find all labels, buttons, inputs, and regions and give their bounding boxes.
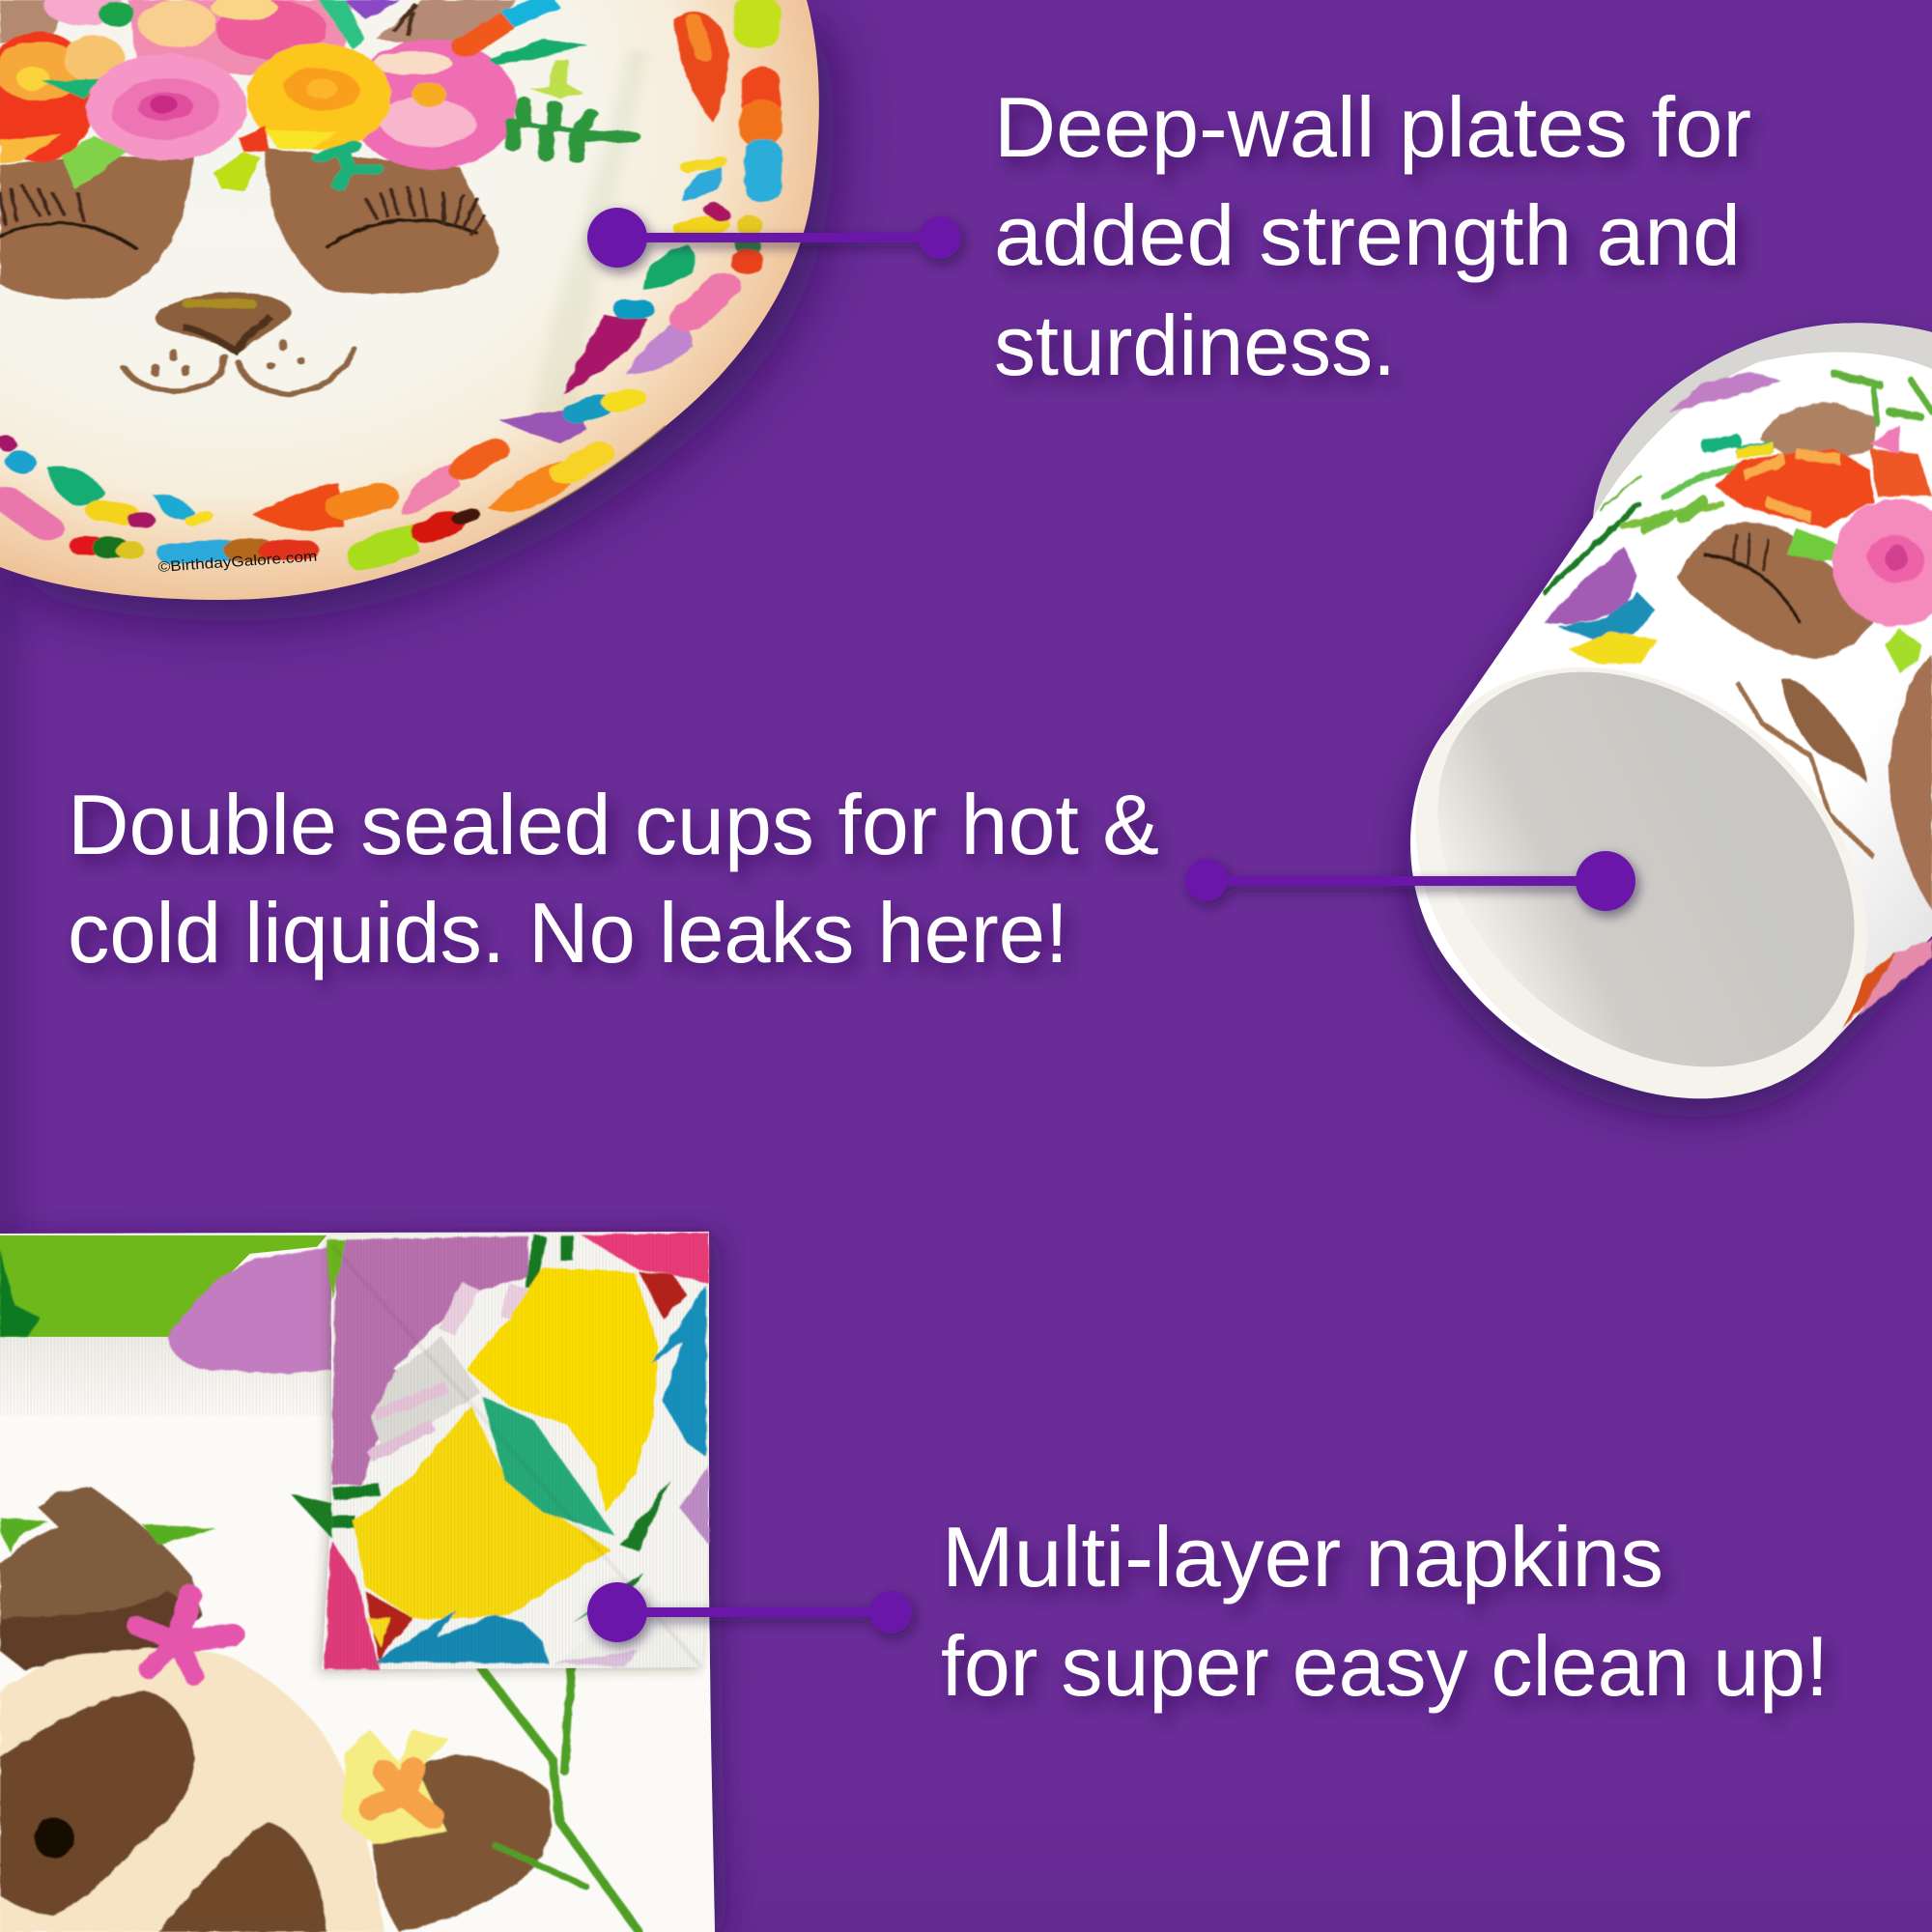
pink corner: [325, 1540, 380, 1669]
panel: paper plate: [0, 0, 819, 600]
brown eye patch: [1678, 523, 1885, 659]
sloth eye: [34, 1818, 74, 1859]
sloth face: [0, 1648, 384, 1932]
closed eyes: [0, 185, 485, 248]
teal leaf: [483, 1397, 615, 1536]
nose and mouth: [1781, 678, 1867, 782]
right ear: [374, 1755, 553, 1932]
cup anchor dot: [1576, 851, 1635, 911]
fold corner triangle: [553, 1586, 701, 1667]
panel: napkin: [0, 1232, 715, 1932]
sloth ear: [0, 1487, 202, 1669]
lilac strokes: [680, 1466, 709, 1545]
small leaf: [572, 1480, 670, 1623]
green band: [0, 1236, 327, 1337]
faint ghost stem: [532, 51, 649, 417]
text block: napkins: for super easy clean up!: [941, 1618, 1829, 1714]
pink rose: [1833, 499, 1932, 626]
plate anchor dot: [587, 208, 647, 268]
plate copyright text: ©BirthdayGalore.com: [157, 549, 318, 576]
lime blob: [1885, 629, 1921, 672]
orange flower: [1715, 449, 1874, 528]
napkin connector line: [617, 1607, 891, 1617]
text block: cups: cold liquids. No leaks here!: [68, 885, 1068, 980]
sloth eye patches: [0, 1690, 194, 1916]
lower yellow wash: [354, 1406, 611, 1619]
diagonal fold line: [331, 1244, 701, 1667]
upper brown patch: [1759, 402, 1876, 460]
text block: plates: added strength and: [994, 187, 1741, 283]
llama eye patches: [0, 148, 499, 299]
cup artwork: [1545, 372, 1932, 1039]
rim feathers: [6, 12, 763, 570]
rib shading: [0, 1337, 331, 1415]
text block: cups: [68, 777, 1159, 980]
llama nose and mouth: [125, 292, 354, 394]
napkin sheet: [0, 1232, 715, 1932]
text block: plates: Deep-wall plates for: [994, 79, 1751, 175]
green strips: [331, 1236, 567, 1521]
small colour strokes: [1705, 440, 1770, 451]
napkin artwork: [0, 1232, 709, 1932]
plate end dot: [919, 216, 961, 259]
cup end dot: [1185, 859, 1228, 901]
llama ears: [0, 0, 516, 49]
closed eye: [1704, 554, 1801, 624]
lilac feather: [1668, 372, 1781, 412]
cup rim: [1593, 323, 1932, 518]
bottom feather: [1828, 952, 1896, 1039]
cup base inner: [1360, 591, 1932, 1148]
pink flower: [137, 1596, 233, 1676]
lilac blotch: [168, 1247, 331, 1374]
text block: napkins: [941, 1509, 1829, 1714]
napkin anchor dot: [587, 1582, 647, 1642]
dark green stem: [0, 1249, 41, 1337]
pale grey fold: [370, 1337, 480, 1452]
connector: cup: [1185, 851, 1635, 911]
green sprigs: [1545, 374, 1932, 592]
plate rim crease shadow: [499, 426, 666, 532]
lilac wash: [331, 1236, 528, 1485]
cup connector line: [1207, 876, 1605, 886]
connector: plate: [587, 208, 961, 268]
sprig leaves: [0, 1517, 216, 1551]
plate connector line: [617, 233, 940, 242]
yellow orange flower: [341, 1729, 449, 1845]
plate artwork: [0, 0, 763, 570]
cup base outer: [1329, 579, 1932, 1187]
right eye patch: [1889, 655, 1932, 910]
ribbed texture: [322, 1232, 709, 1669]
text block: cups: Double sealed cups for hot &: [68, 777, 1159, 872]
text block: napkins: Multi-layer napkins: [942, 1509, 1663, 1605]
green leaf: [1787, 528, 1842, 562]
panel: paper cup: [1329, 323, 1932, 1187]
text block: plates: [994, 79, 1751, 393]
upper yellow wash: [466, 1267, 658, 1513]
cup body: [1410, 323, 1932, 1095]
top right pink: [582, 1233, 709, 1284]
connector: napkin: [587, 1582, 912, 1642]
flower crown: [0, 0, 632, 191]
purple blue yellow feather: [1545, 547, 1637, 624]
plate body: [0, 0, 819, 600]
napkin end dot: [869, 1591, 912, 1634]
text block: plates: sturdiness.: [994, 298, 1396, 393]
folded corner: [291, 1232, 709, 1669]
green stems: [480, 1665, 639, 1932]
blue feathers: [375, 1609, 548, 1662]
